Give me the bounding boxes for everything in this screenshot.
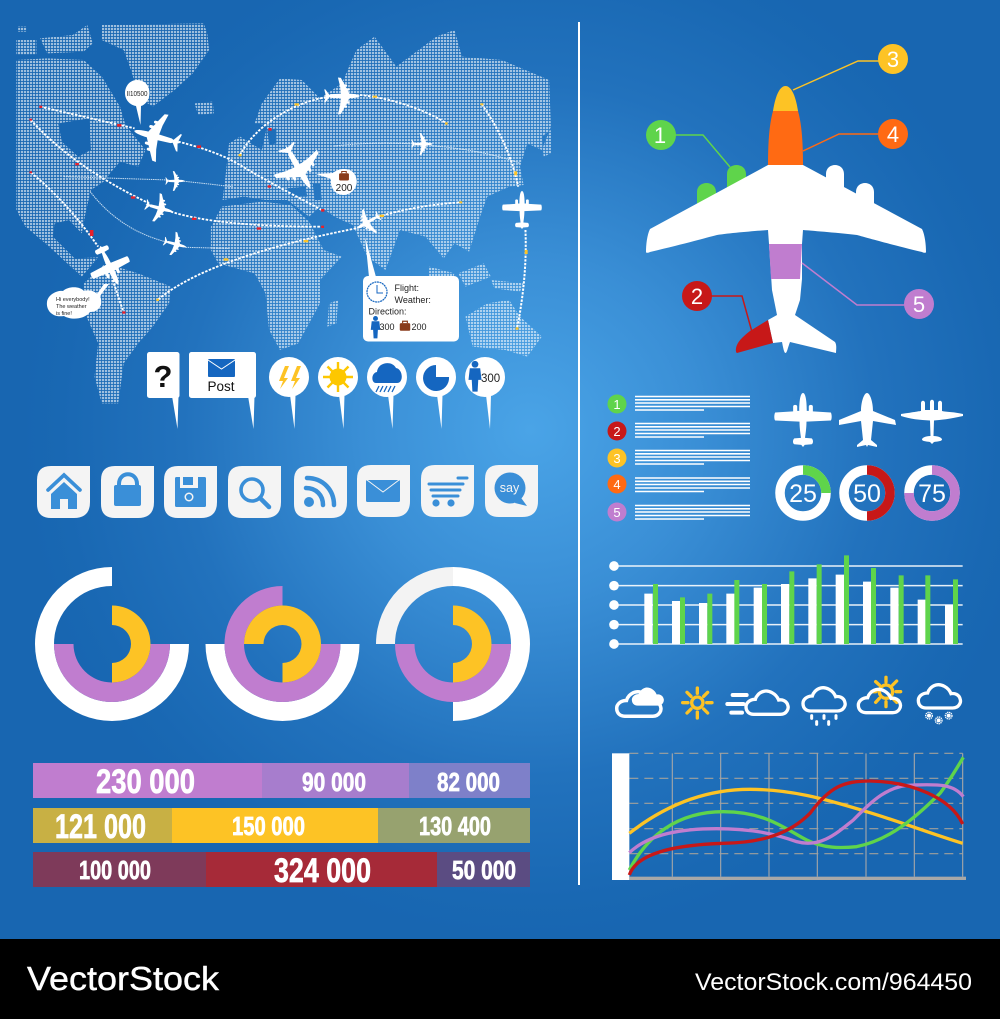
bar row 1 [33, 763, 530, 801]
callout 1: 1 [654, 123, 666, 148]
icon: sun [683, 688, 712, 718]
tail section [736, 320, 773, 353]
engines [697, 165, 874, 208]
callout: flight info card: 300 [380, 322, 395, 332]
plane: jet over mid Atlantic [142, 190, 176, 226]
bar row 1: 230 000 [96, 763, 195, 801]
icon: home [37, 466, 90, 518]
footer band [0, 939, 1000, 1019]
ring chart 3 [376, 567, 530, 721]
callout 3: 3 [887, 47, 899, 72]
pin: question mark: ? [154, 359, 172, 394]
icon: cart [421, 465, 474, 517]
bar row 3: 324 000 [274, 852, 371, 890]
legend item 1 [608, 394, 750, 414]
plane silhouette: four-engine prop [774, 393, 832, 447]
pin: post [189, 352, 256, 429]
bar row 2: 150 000 [232, 811, 305, 841]
plane: jet over Europe [264, 134, 332, 200]
footer URL: VectorStock.com/964450 [695, 969, 972, 996]
plane silhouette: bomber [901, 400, 963, 444]
legend item 4 [608, 474, 750, 494]
plane: small jet over Asia [411, 133, 433, 155]
ring chart 1 [35, 567, 189, 721]
bar chart [609, 555, 963, 649]
legend item 2: 2 [613, 424, 621, 439]
plane: jet over Russia [324, 78, 360, 114]
bar row 3: 50 000 [452, 855, 516, 885]
callout: flight info card [363, 237, 459, 342]
icon: mail [357, 465, 410, 517]
callout 3 [793, 44, 908, 90]
callout 4: 4 [887, 122, 899, 147]
plane: propeller plane over Asia [502, 191, 542, 229]
callout: speech cloud [47, 284, 109, 319]
pin: sun [318, 357, 358, 429]
legend item 1: 1 [613, 397, 621, 412]
pin: lightning [269, 357, 309, 429]
callout: flight info card: Weather: [394, 295, 431, 305]
plane: jet over south Atlantic [161, 229, 189, 259]
legend item 3: 3 [613, 451, 621, 466]
icon: clock [367, 282, 387, 302]
pin: rain cloud [367, 357, 407, 429]
vertical divider [578, 22, 580, 885]
world map [16, 23, 551, 403]
weather icons [617, 677, 960, 724]
callout 2 [682, 281, 752, 332]
donut 50: 50 [853, 480, 881, 508]
pin: passengers: 300 [481, 373, 500, 385]
icon: say bubble [485, 465, 538, 517]
icon: cloudy [617, 687, 664, 716]
icon: windy cloud [727, 691, 788, 714]
icon row [37, 465, 538, 518]
plane: small jet over Atlantic [165, 171, 185, 191]
bar row 1: 90 000 [302, 767, 366, 797]
callout 1 [646, 120, 730, 167]
callout: altitude bubble [125, 80, 150, 125]
icon: rain cloud [803, 688, 845, 724]
plane: large jet heading west [128, 107, 186, 167]
legend item 5 [608, 502, 750, 522]
line: green [629, 757, 963, 870]
donut 25: 25 [789, 480, 817, 508]
plane: propeller plane over South America [81, 237, 137, 293]
callout 2: 2 [691, 284, 703, 309]
plane: jet over Arabia [350, 204, 386, 240]
pin: question mark [147, 352, 180, 429]
plane silhouette: jet [839, 393, 896, 447]
line: red [629, 781, 963, 875]
donut 25 [780, 470, 826, 516]
pin: pie [416, 357, 456, 429]
icon: sun behind cloud [858, 677, 901, 713]
nose section [773, 86, 798, 111]
stacked number bars [33, 763, 530, 890]
wings and fuselage [646, 165, 926, 353]
flight paths [29, 95, 528, 330]
large airplane diagram [646, 44, 934, 353]
legend item 3 [608, 448, 750, 468]
donut 75: 75 [918, 480, 946, 508]
legend item 4: 4 [613, 477, 621, 492]
icon: say bubble: say [500, 481, 520, 495]
pin: passengers [465, 357, 505, 429]
bar row 2: 121 000 [55, 808, 146, 846]
callout 5: 5 [913, 292, 925, 317]
icon: snow cloud [918, 685, 960, 724]
footer logo: VectorStock [27, 960, 220, 997]
icon: floppy disk [164, 466, 217, 518]
icon: search [228, 466, 281, 518]
callout: flight info card: Flight: [394, 283, 419, 293]
donut 50 [844, 470, 890, 516]
donut 75 [909, 470, 955, 516]
bar row 3: 100 000 [79, 855, 151, 885]
legend item 5: 5 [613, 505, 621, 520]
bar row 3 [33, 852, 530, 890]
bar row 2: 130 400 [419, 811, 491, 841]
callout: speech cloud: Hi everybody! [56, 297, 90, 303]
cockpit section [768, 111, 803, 165]
callout 4 [803, 119, 908, 151]
callout: speech cloud: is fine! [56, 311, 72, 317]
callout: flight info card: 200 [412, 322, 427, 332]
legend item 2 [608, 422, 750, 440]
line: purple [629, 785, 963, 853]
line: yellow [629, 789, 963, 843]
callout 5 [802, 263, 934, 319]
callout: baggage bubble: 200 [336, 183, 353, 194]
icon: RSS [294, 466, 347, 518]
callout: altitude bubble: II10500 [126, 89, 148, 98]
icon: lock [101, 466, 154, 518]
callout: flight info card: Direction: [368, 306, 407, 316]
line chart [612, 753, 966, 880]
bar row 2 [33, 808, 530, 846]
rear fuselage section [769, 244, 802, 279]
callout: baggage bubble [316, 169, 357, 195]
callout: speech cloud: The weather [56, 304, 87, 310]
numbered legend [608, 394, 750, 522]
dotted continents [16, 23, 551, 403]
bar row 1: 82 000 [437, 767, 500, 797]
pin: post: Post [207, 379, 235, 394]
ring chart 2 [206, 586, 360, 721]
